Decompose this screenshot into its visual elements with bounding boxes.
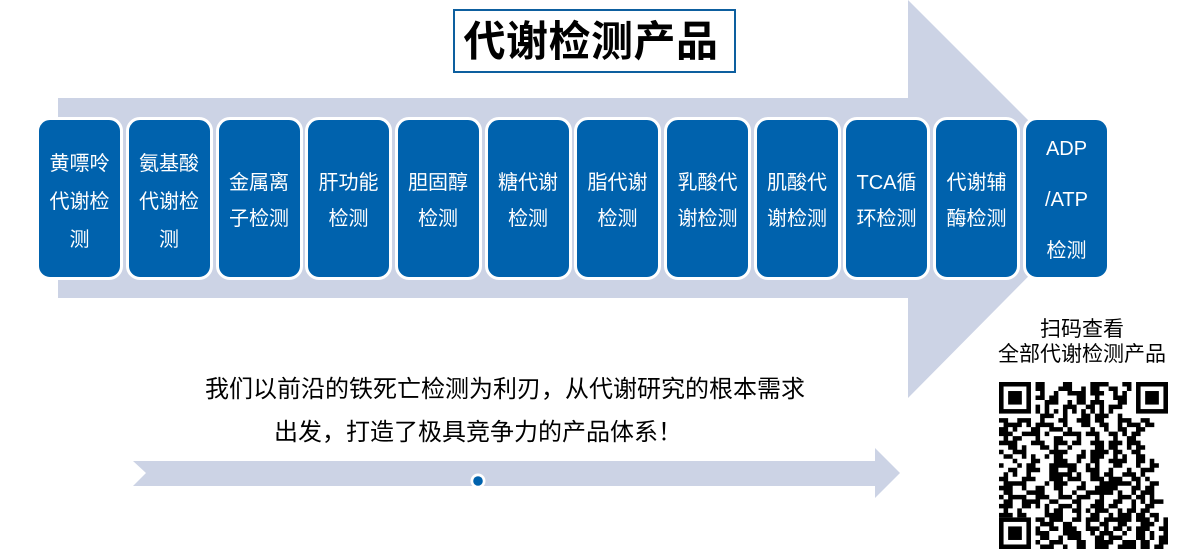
- card: ADP/ATP: 检测: [1046, 240, 1086, 262]
- title: [453, 9, 736, 73]
- card: metal ion: [216, 117, 302, 280]
- card: ADP/ATP: /ATP: [1045, 188, 1088, 210]
- card: liver function: [305, 117, 392, 280]
- timeline dot: [470, 474, 486, 486]
- card: lipid metabolism: [574, 117, 661, 280]
- description text: [205, 376, 805, 446]
- description line 1: 我们以前沿的铁死亡检测为利刃，从代谢研究的根本需求: [205, 376, 805, 403]
- card: lipid metabolism: 脂代谢检测: [588, 172, 648, 230]
- small timeline arrow: [133, 448, 900, 498]
- QR caption: [998, 318, 1166, 366]
- card: liver function: 肝功能检测: [318, 172, 378, 230]
- card: lactate: 乳酸代谢检测: [678, 172, 738, 230]
- card: cholesterol: 胆固醇检测: [408, 172, 468, 230]
- QR caption: 扫码查看: [1040, 318, 1124, 341]
- card: TCA cycle: TCA循环检测: [856, 172, 916, 230]
- card: creatine: [754, 117, 840, 280]
- card: ADP/ATP: [1023, 117, 1110, 280]
- card: glucose metabolism: [484, 117, 572, 280]
- title: 代谢检测产品: [463, 18, 718, 65]
- card: amino acid: [126, 117, 212, 280]
- card: cholesterol: [394, 117, 482, 280]
- card: amino acid: 氨基酸代谢检测: [139, 152, 199, 250]
- card: glucose metabolism: 糖代谢检测: [498, 172, 558, 230]
- card: ADP/ATP: ADP: [1046, 138, 1087, 160]
- card: purine: [36, 117, 123, 280]
- QR caption: 全部代谢检测产品: [998, 343, 1166, 366]
- card: lactate: [664, 117, 751, 280]
- icon: QR code: [999, 382, 1168, 549]
- card: coenzyme: [933, 117, 1020, 280]
- description line 2: 出发，打造了极具竞争力的产品体系！: [274, 419, 682, 446]
- card: metal ion: 金属离子检测: [229, 172, 289, 230]
- card: coenzyme: 代谢辅酶检测: [946, 172, 1006, 230]
- card: purine: 黄嘌呤代谢检测: [50, 152, 110, 250]
- card: TCA cycle: [843, 117, 930, 280]
- card: creatine: 肌酸代谢检测: [767, 172, 827, 230]
